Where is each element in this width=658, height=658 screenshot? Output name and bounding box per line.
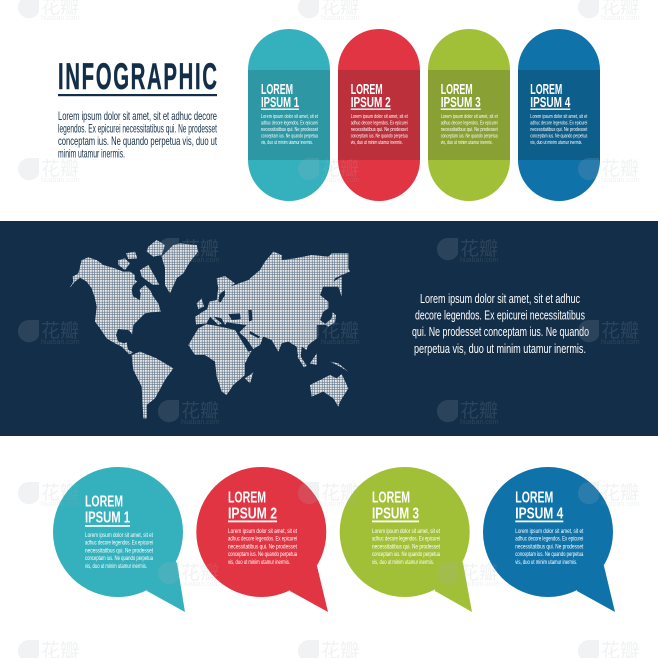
uk [197,298,204,309]
map text block [412,291,589,356]
panel: bubble 3: vis, duo ut minim utamur inermis. [372,560,434,566]
panel: pill 2: necessitatibus qui. Ne prodesset [351,127,408,133]
watermarks: 花瓣 [601,482,639,504]
watermarks: huaban.com [181,581,220,588]
panel: pill 1: vis, duo ut minim utamur inermis. [261,140,313,146]
panel: bubble 3 [340,467,472,612]
watermarks: 花瓣 [321,482,359,504]
australia [310,374,348,407]
watermarks: 花瓣 [601,320,639,342]
panel: pill 2 [338,29,420,201]
panel: pill 3: Lorem ipsum dolor sit amet, sit et [441,114,498,120]
watermarks: huaban.com [181,419,220,426]
panel: navy map band [0,221,658,436]
panel: bubble 1: vis, duo ut minim utamur inermis. [85,564,147,570]
watermarks: huaban.com [321,15,360,22]
watermarks: huaban.com [321,501,360,508]
panel: bubble 1: IPSUM 1 [85,510,130,527]
panel: bubble 4: LOREM [515,490,553,507]
watermarks: 花瓣 [460,238,498,260]
panel: pill 4: necessitatibus qui. Ne prodesset [530,127,588,133]
panel: pill 1: Lorem ipsum dolor sit amet, sit et [261,114,318,120]
watermarks: 花瓣 [41,320,79,342]
panel: pill 3 [428,29,510,201]
panel: bubble 2: IPSUM 2 [228,506,277,522]
watermarks: huaban.com [181,257,220,264]
watermarks: huaban.com [41,15,80,22]
panel: pill 2: Lorem ipsum dolor sit amet, sit et [351,114,408,120]
world map [69,240,350,418]
intro text block: Lorem ipsum dolor sit amet, sit et adhuc decore [58,109,217,123]
watermarks: 花瓣 [41,158,79,180]
panel: pill 2: conceptam ius. Ne quando perpetua [351,134,408,140]
watermarks: huaban.com [460,257,499,264]
watermarks: huaban.com [41,177,80,184]
panel: bubble 1: necessitatibus qui. Ne prodesset [85,548,153,554]
japan [325,312,336,327]
watermarks: huaban.com [321,339,360,346]
panel: bubble 4: vis, duo ut minim utamur inermis. [515,560,578,566]
panel: bubble 2: adhuc decore legendos. Ex epicurei [228,537,297,543]
panel: bubble 3: Lorem ipsum dolor sit amet, sit et [372,529,440,535]
watermarks: huaban.com [460,419,499,426]
panel: bubble 3: necessitatibus qui. Ne prodesset [372,544,440,550]
watermarks: 花瓣 [321,320,359,342]
panel: pill 1: conceptam ius. Ne quando perpetua [261,134,318,140]
watermarks: 花瓣 [41,482,79,504]
eurasia [195,252,350,367]
arctic islands [118,240,165,285]
panel: bubble 1: adhuc decore legendos. Ex epicurei [85,541,153,547]
panel: bubble 4: IPSUM 4 [515,506,563,522]
watermarks: huaban.com [460,581,499,588]
panel: pill 3: adhuc decore legendos. Ex epicurei [441,120,498,126]
south america [132,352,173,418]
watermarks: 花瓣 [181,400,219,422]
north america [69,257,161,354]
panel: bubble 3: conceptam ius. Ne quando perpetua [372,552,440,558]
intro text block: conceptam ius. Ne quando perpetua vis, duo ut [58,134,217,148]
panel: bubble 2: vis, duo ut minim utamur inermis. [228,560,290,566]
panel: bubble 3: IPSUM 3 [372,506,419,522]
panel: pill 3: conceptam ius. Ne quando perpetua [441,134,498,140]
new guinea [330,362,348,372]
greenland [162,243,198,293]
panel: bubble 1: Lorem ipsum dolor sit amet, sit et [85,533,153,539]
panel: pill 2: LOREM [351,81,383,98]
panel: bubble 3: adhuc decore legendos. Ex epicurei [372,537,440,543]
panel: bubble 4 [483,467,615,612]
panel: bubble 2: Lorem ipsum dolor sit amet, sit et [228,529,297,535]
panel: pill 4: vis, duo ut minim utamur inermis. [530,140,582,146]
watermarks: huaban.com [321,177,360,184]
map text block: Lorem ipsum dolor sit amet, sit et adhuc [420,291,580,306]
panel: bubble 2: LOREM [228,490,266,507]
intro text block: minim utamur inermis. [58,146,125,160]
panel: pill 4: Lorem ipsum dolor sit amet, sit et [530,114,588,120]
watermarks: huaban.com [41,501,80,508]
panel: pill 4: IPSUM 4 [530,94,571,111]
panel: bubble 4: Lorem ipsum dolor sit amet, sit et [515,529,584,535]
watermarks: huaban.com [601,177,640,184]
panel: pill 4: LOREM [530,81,562,98]
panel: pill 1: IPSUM 1 [261,94,299,111]
watermarks: 花瓣 [460,562,498,584]
panel: pill 1: adhuc decore legendos. Ex epicurei [261,120,318,126]
panel: pill 3: necessitatibus qui. Ne prodesset [441,127,498,133]
panel: bubble 1 [53,467,185,612]
panel: bubble 3: LOREM [372,490,410,507]
panel: pill 4: adhuc decore legendos. Ex epicurei [530,120,587,126]
panel: pill 4: conceptam ius. Ne quando perpetua [530,134,587,140]
panel: bubble 4: adhuc decore legendos. Ex epicurei [515,537,583,543]
panel: bubble 4: necessitatibus qui. Ne prodesset [515,544,584,550]
panel: pill 3: vis, duo ut minim utamur inermis. [441,140,493,146]
panel: pill 2: IPSUM 2 [351,94,391,111]
panel: pill 4 [518,29,600,201]
panel: pill 1: necessitatibus qui. Ne prodesset [261,127,318,133]
watermarks: 花瓣 [460,400,498,422]
intro text block [58,109,217,160]
africa [188,324,252,395]
watermarks: 花瓣 [181,562,219,584]
watermarks: huaban.com [601,339,640,346]
panel: bubble 4: conceptam ius. Ne quando perpetua [515,552,584,558]
watermarks: huaban.com [601,501,640,508]
indonesia [297,353,317,367]
madagascar [245,372,253,383]
title: INFOGRAPHIC [58,57,217,98]
panel: pill 3: IPSUM 3 [441,94,481,111]
panel: bubble 1: conceptam ius. Ne quando perpetua [85,556,153,562]
intro text block: legendos. Ex epicurei necessitatibus qui. Ne prodesset [58,122,217,136]
inland seas [218,290,260,338]
panel: bubble 2: conceptam ius. Ne quando perpetua [228,552,297,558]
map text block: perpetua vis, duo ut minim utamur inermis. [414,341,586,356]
panel: bubble 1: LOREM [85,494,123,511]
watermarks: 花瓣 [321,158,359,180]
panel: pill 1: LOREM [261,81,293,98]
panel: bubble 2 [196,467,328,612]
watermarks: 花瓣 [601,158,639,180]
panel: pill 1 [248,29,330,201]
panel: pill 2: vis, duo ut minim utamur inermis. [351,140,403,146]
watermarks: huaban.com [601,15,640,22]
watermarks: huaban.com [41,339,80,346]
panel: bubble 2: necessitatibus qui. Ne prodesset [228,544,297,550]
watermarks: 花瓣 [181,238,219,260]
panel: pill 2: adhuc decore legendos. Ex epicurei [351,120,408,126]
panel: pill 3: LOREM [441,81,473,98]
